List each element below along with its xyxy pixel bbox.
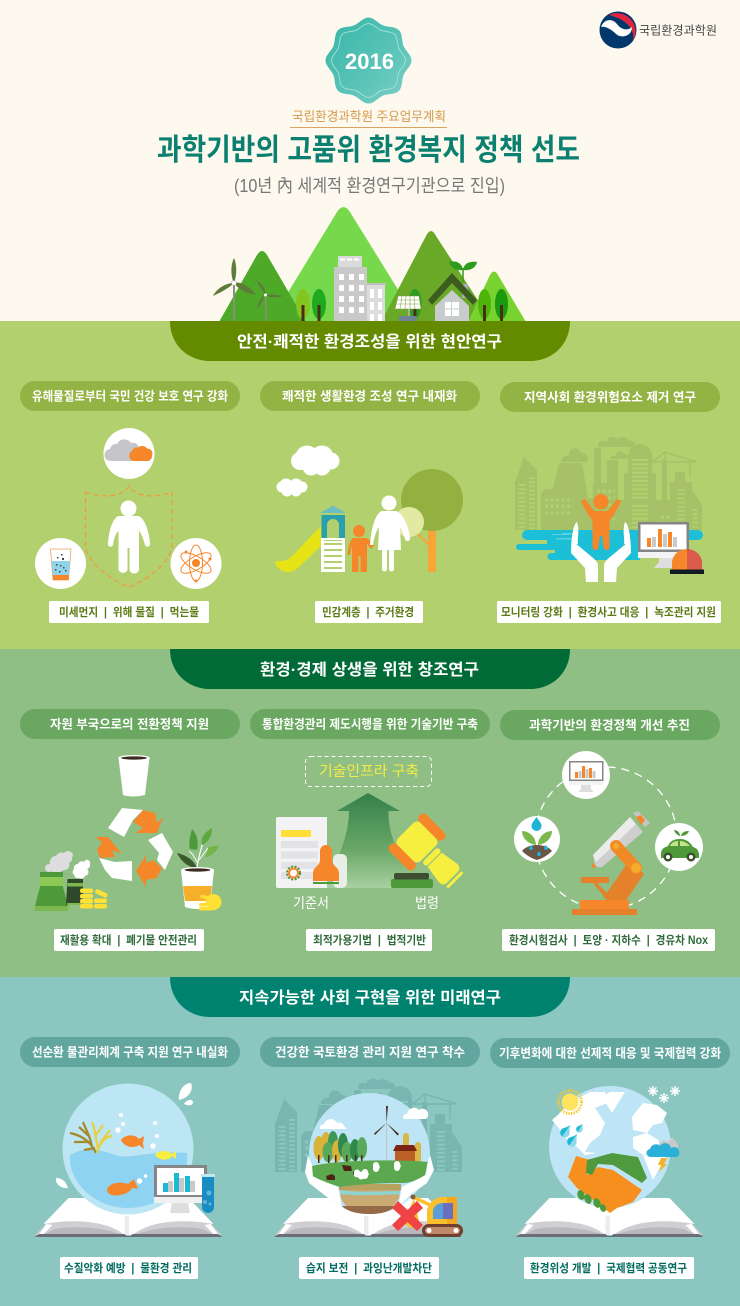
callout: 기술인프라 구축	[306, 756, 432, 786]
icon: person in hands	[571, 494, 631, 582]
icon: storm cloud	[646, 1137, 679, 1172]
label 2	[315, 601, 423, 623]
title: 과학기반의 고품위 환경복지 정책 선도	[157, 134, 580, 167]
pill heading 3: 과학기반의 환경정책 개선 추진	[529, 718, 690, 732]
label 1: 재활용 확대 | 폐기물 안전관리	[60, 933, 197, 947]
icon: dashed cycle	[535, 767, 677, 909]
illustration: mountains and town	[213, 207, 526, 322]
icon: eco car circle	[655, 823, 703, 871]
badge: 2016	[326, 18, 412, 104]
icon: microscope	[572, 811, 650, 915]
section banner	[170, 649, 570, 689]
pill heading 3	[500, 710, 720, 740]
pill heading 1: 자원 부국으로의 전환정책 지원	[50, 718, 209, 732]
panel: 안전 쾌적 현안연구	[0, 321, 740, 649]
panel: 환경 경제 창조연구	[0, 649, 740, 977]
tree and solar panel	[395, 289, 422, 322]
icon: skyline background	[275, 1079, 462, 1172]
icon: handshake	[568, 1153, 647, 1213]
section banner	[170, 321, 570, 361]
icon: sun	[558, 1090, 582, 1114]
icon: fishbowl	[56, 1083, 194, 1214]
label 3	[502, 929, 715, 951]
label 2	[299, 1257, 439, 1279]
icon: open book 2	[275, 1198, 461, 1237]
icon: recycling arrows	[95, 808, 173, 887]
icon: factories with smoke	[35, 851, 90, 911]
label 1	[49, 601, 209, 623]
text: 법령: 법령	[415, 895, 439, 911]
pill heading 2: 통합환경관리 제도시행을 위한 기술기반 구축	[262, 716, 478, 732]
sub heading: (10년 內 세계적 환경연구기관으로 진입)	[234, 176, 505, 196]
pill heading 1: 선순환 물관리체계 구축 지원 연구 내실화	[32, 1044, 228, 1060]
icon: test tube	[201, 1174, 215, 1213]
icon: coffee cup	[118, 755, 150, 796]
label 1: 수질악화 예방 | 물환경 관리	[64, 1261, 192, 1275]
text: 기준서: 기준서	[293, 895, 329, 911]
pill heading 2	[250, 709, 490, 739]
label 1: 미세먼지 | 위해 물질 | 먹는물	[59, 606, 199, 619]
label 3: 모니터링 강화 | 환경사고 대응 | 녹조관리 지원	[501, 605, 716, 619]
icon: cloud circle	[104, 428, 154, 479]
icon: snowflakes	[648, 1086, 680, 1103]
icon: monitor with chart	[154, 1165, 207, 1213]
label 3	[524, 1257, 694, 1279]
badge: 2016: 2016	[345, 49, 394, 74]
pill heading 2: 건강한 국토환경 관리 지원 연구 착수	[275, 1044, 465, 1060]
pill heading 3: 지역사회 환경위험요소 제거 연구	[524, 390, 696, 404]
label 2: 최적가용기법 | 법적기반	[313, 933, 426, 947]
pill heading 1	[20, 381, 240, 411]
icon: earth globe	[549, 1086, 671, 1208]
background: cream header	[0, 0, 740, 321]
icon: water glass circle	[35, 538, 86, 589]
icon: globe with land layers	[309, 1093, 430, 1214]
label 1	[60, 1257, 198, 1279]
pill heading 3	[490, 1038, 730, 1068]
label 2: 민감계층 | 주거환경	[322, 605, 414, 619]
section banner: 지속가능한 사회 구현을 위한 미래연구	[239, 989, 501, 1007]
pill heading 2	[260, 381, 480, 411]
icon: open book 1	[36, 1198, 222, 1237]
pill heading 3: 기후변화에 대한 선제적 대응 및 국제협력 강화	[499, 1046, 721, 1060]
section banner: 안전·쾌적한 환경조성을 위한 현안연구	[237, 333, 502, 351]
arrow: upward	[322, 793, 415, 888]
icon: plant in cup with coins	[177, 828, 222, 910]
icon: sprout circle	[514, 816, 560, 862]
icon: tree	[394, 469, 463, 572]
label 1	[54, 929, 204, 951]
icon: gavel	[387, 812, 474, 899]
section banner: 환경·경제 상생을 위한 창조연구	[260, 661, 479, 679]
subtitle: 국립환경과학원 주요업무계획	[292, 109, 446, 124]
pill heading 1	[20, 709, 240, 739]
label 3: 환경시험검사 | 토양 · 지하수 | 경유차 Nox	[509, 933, 709, 947]
icon: clouds	[276, 446, 340, 496]
pill heading 2	[260, 1037, 480, 1067]
header logo: 국립환경과학원	[639, 24, 717, 38]
section banner	[170, 977, 570, 1017]
icon: child	[348, 525, 374, 572]
pill heading 1	[20, 1037, 240, 1067]
icon: dashed shield with person	[86, 486, 172, 587]
house with sprout	[428, 261, 477, 322]
pill heading 1: 유해물질로부터 국민 건강 보호 연구 강화	[32, 388, 228, 404]
icon: monitor circle	[562, 751, 610, 799]
label 2: 습지 보전 | 과잉난개발차단	[306, 1261, 432, 1275]
trees right	[478, 289, 508, 322]
label 2	[306, 929, 432, 951]
wind turbines	[213, 258, 283, 322]
trees left	[296, 289, 326, 322]
icon: woman	[370, 496, 410, 572]
icon: raindrops	[558, 1122, 585, 1148]
icon: monitor	[638, 522, 689, 568]
office building	[334, 256, 386, 322]
icon: document with stamp	[276, 817, 347, 888]
icon: open book 3	[516, 1198, 702, 1237]
header logo	[600, 12, 717, 48]
label 3: 환경위성 개발 | 국제협력 공동연구	[530, 1261, 687, 1275]
label 3	[497, 601, 721, 623]
icon: city skyline and water	[515, 437, 703, 560]
panel: 지속가능 사회 미래연구	[0, 977, 740, 1306]
pill heading 3	[500, 382, 720, 412]
icon: hands holding land	[305, 1155, 434, 1208]
icon: coins	[80, 888, 108, 908]
icon: siren	[670, 549, 704, 574]
icon: slide playground	[275, 506, 346, 572]
pill heading 2: 쾌적한 생활환경 조성 연구 내재화	[282, 388, 457, 404]
icon: red X and excavator	[392, 1194, 463, 1237]
icon: atom circle	[170, 538, 222, 589]
callout: 기술인프라 구축: 기술인프라 구축	[319, 763, 419, 780]
